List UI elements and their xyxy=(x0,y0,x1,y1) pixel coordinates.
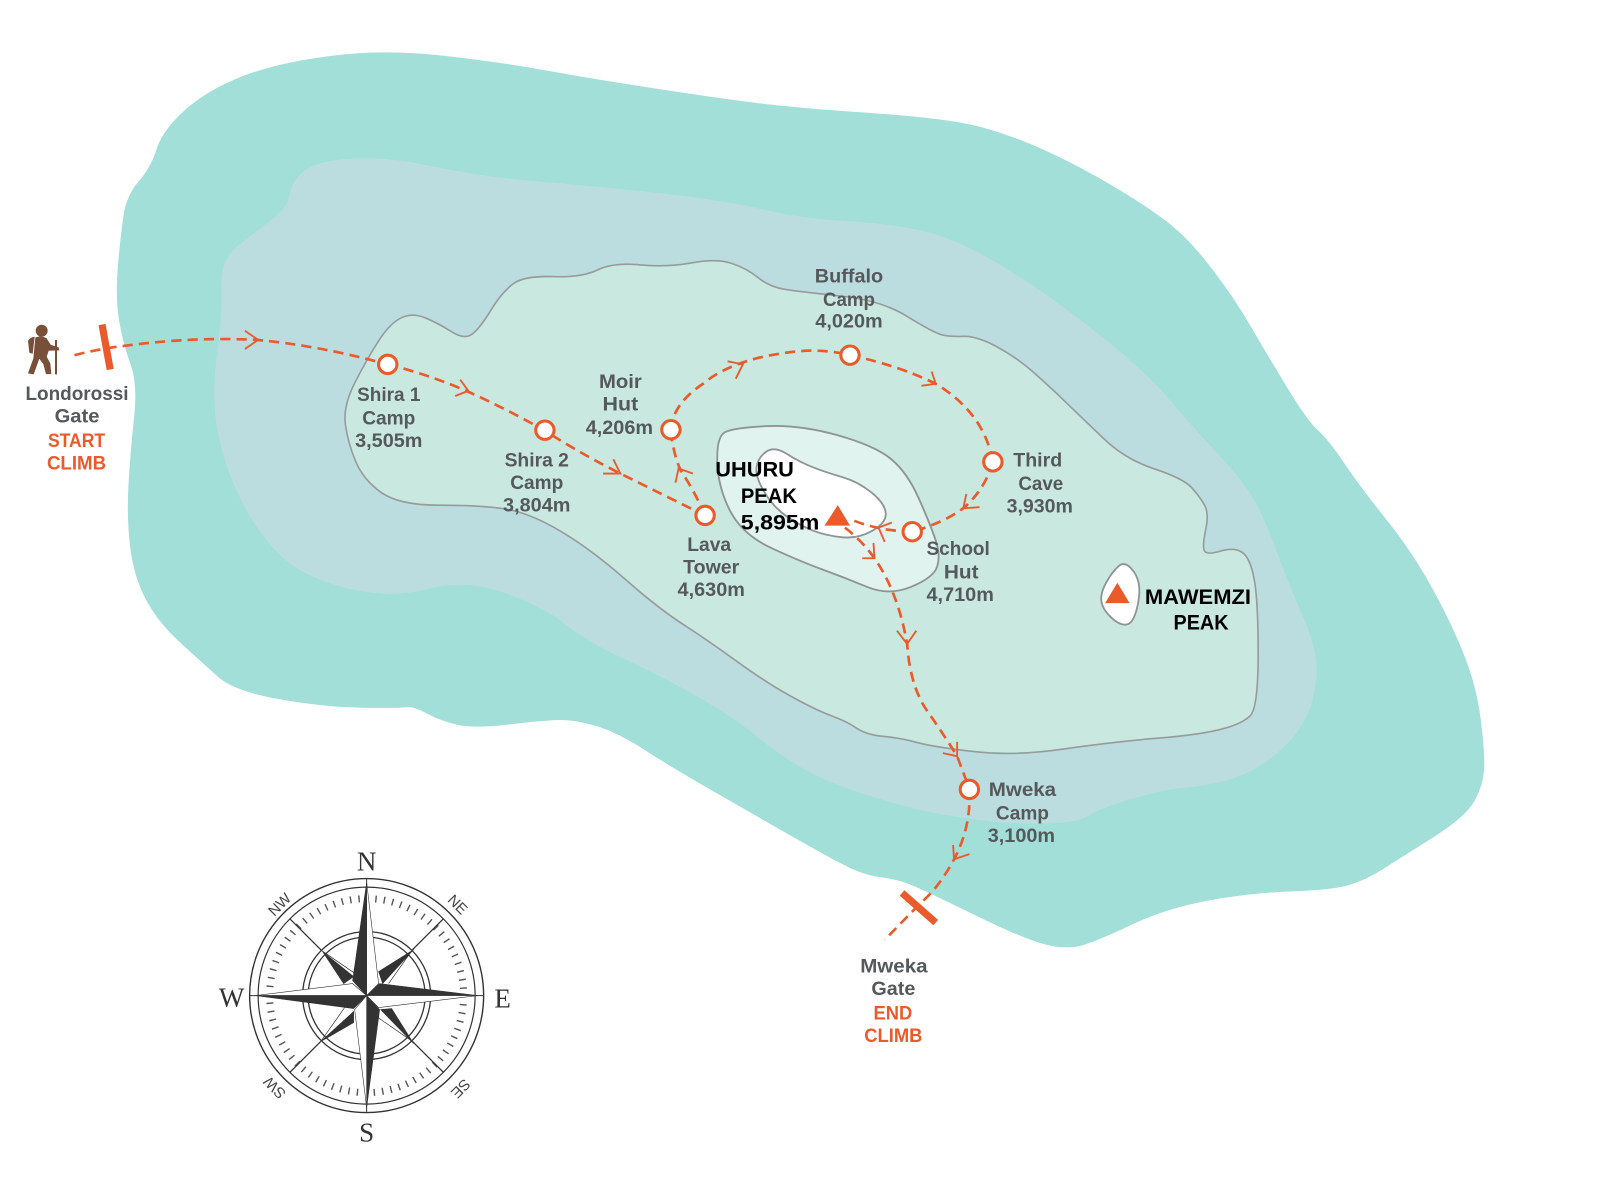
label: start climb: CLIMB xyxy=(47,453,106,474)
compass: cardinal letters: N xyxy=(357,847,376,877)
icon: Uhuru peak triangle xyxy=(824,505,850,526)
label: Shira 2 Camp: Camp xyxy=(510,473,563,494)
icon: hiker xyxy=(28,325,59,374)
compass: intercardinal letters: SW xyxy=(260,1072,290,1102)
label: Uhuru Peak: UHURU xyxy=(715,458,794,482)
compass: intercardinal letters: NE xyxy=(444,892,471,918)
label: School Hut xyxy=(927,539,994,606)
label: end climb: CLIMB xyxy=(864,1026,922,1047)
compass: cardinal letters: E xyxy=(494,984,511,1014)
label: Shira 2 Camp: Shira 2 xyxy=(505,450,569,471)
label: Uhuru Peak xyxy=(715,458,819,535)
label: School Hut: Hut xyxy=(944,563,979,584)
compass: cardinal letters xyxy=(219,847,511,1148)
label: Third Cave: Cave xyxy=(1018,474,1063,495)
compass: cardinal letters: S xyxy=(359,1118,374,1148)
label: Shira 1 Camp: Shira 1 xyxy=(357,385,421,406)
label: Lava Tower: 4,630m xyxy=(678,580,745,601)
zone: middle blue moorland xyxy=(214,158,1317,824)
label: Moir Hut: Hut xyxy=(603,394,639,415)
label: Londorossi Gate: Gate xyxy=(55,407,99,428)
zone: glacier ring around Uhuru xyxy=(717,426,939,591)
zone: inner green alpine desert xyxy=(345,261,1258,753)
label: Mweka Camp xyxy=(988,780,1057,847)
label: end climb: END xyxy=(873,1003,912,1024)
icon: Mawemzi peak triangle xyxy=(1105,583,1130,603)
label: Mweka Camp: Mweka xyxy=(989,780,1057,801)
label: Buffalo Camp: Camp xyxy=(823,290,875,311)
label: Mweka Camp: 3,100m xyxy=(988,826,1055,847)
zone: outer teal rainforest xyxy=(117,52,1484,947)
compass: star xyxy=(256,883,478,1108)
label: start climb: START xyxy=(48,431,105,452)
arrow: chevrons along route xyxy=(245,331,980,859)
label: Moir Hut xyxy=(586,372,653,439)
label: Lava Tower: Lava xyxy=(687,535,732,556)
label: Mawemzi Peak: PEAK xyxy=(1173,611,1229,635)
label: start climb xyxy=(47,431,106,474)
label: Mweka Gate: Mweka xyxy=(860,957,928,978)
icon: Mawemzi Peak patch xyxy=(1101,564,1139,625)
waypoints: camp circles xyxy=(379,346,1002,799)
compass: intercardinal letters xyxy=(260,890,473,1102)
label: Londorossi Gate xyxy=(26,384,129,428)
label: Uhuru Peak: 5,895m xyxy=(741,511,819,535)
label: Shira 2 Camp: 3,804m xyxy=(503,495,570,516)
label: Third Cave: Third xyxy=(1013,450,1062,471)
label: Buffalo Camp xyxy=(815,267,883,333)
label: Mawemzi Peak: MAWEMZI xyxy=(1145,585,1251,609)
label: Mweka Gate: Gate xyxy=(871,979,915,1000)
label: Moir Hut: 4,206m xyxy=(586,418,653,439)
label: Shira 1 Camp: 3,505m xyxy=(355,431,422,452)
label: Mawemzi Peak xyxy=(1145,585,1251,635)
compass: rings xyxy=(250,879,484,1113)
compass: intercardinal letters: NW xyxy=(265,890,295,920)
route: dashed climbing trail xyxy=(74,331,993,940)
label: Shira 1 Camp: Camp xyxy=(362,409,415,430)
label: Buffalo Camp: Buffalo xyxy=(815,267,883,288)
label: Shira 2 Camp xyxy=(503,450,570,516)
label: end climb xyxy=(864,1003,922,1047)
label: Mweka Camp: Camp xyxy=(996,803,1049,824)
compass rose xyxy=(219,847,511,1148)
label: Buffalo Camp: 4,020m xyxy=(815,312,883,333)
label: Mweka Gate xyxy=(860,957,928,1000)
icon: end gate bar xyxy=(902,893,936,923)
label: Third Cave: 3,930m xyxy=(1007,496,1073,517)
label: Uhuru Peak: PEAK xyxy=(741,484,797,508)
label: Lava Tower: Tower xyxy=(683,558,740,579)
label: Shira 1 Camp xyxy=(355,385,422,452)
label: School Hut: 4,710m xyxy=(927,585,994,606)
label: Lava Tower xyxy=(678,535,745,601)
compass: cardinal letters: W xyxy=(219,983,245,1013)
label: Londorossi Gate: Londorossi xyxy=(26,384,129,405)
map: mountain terrain zones xyxy=(117,52,1484,947)
label: Third Cave xyxy=(1007,450,1073,517)
label: School Hut: School xyxy=(927,539,990,560)
zone: summit ice cap xyxy=(756,449,886,538)
icon: start gate bar xyxy=(102,325,110,369)
label: Moir Hut: Moir xyxy=(599,372,642,393)
compass: intercardinal letters: SE xyxy=(447,1075,473,1101)
